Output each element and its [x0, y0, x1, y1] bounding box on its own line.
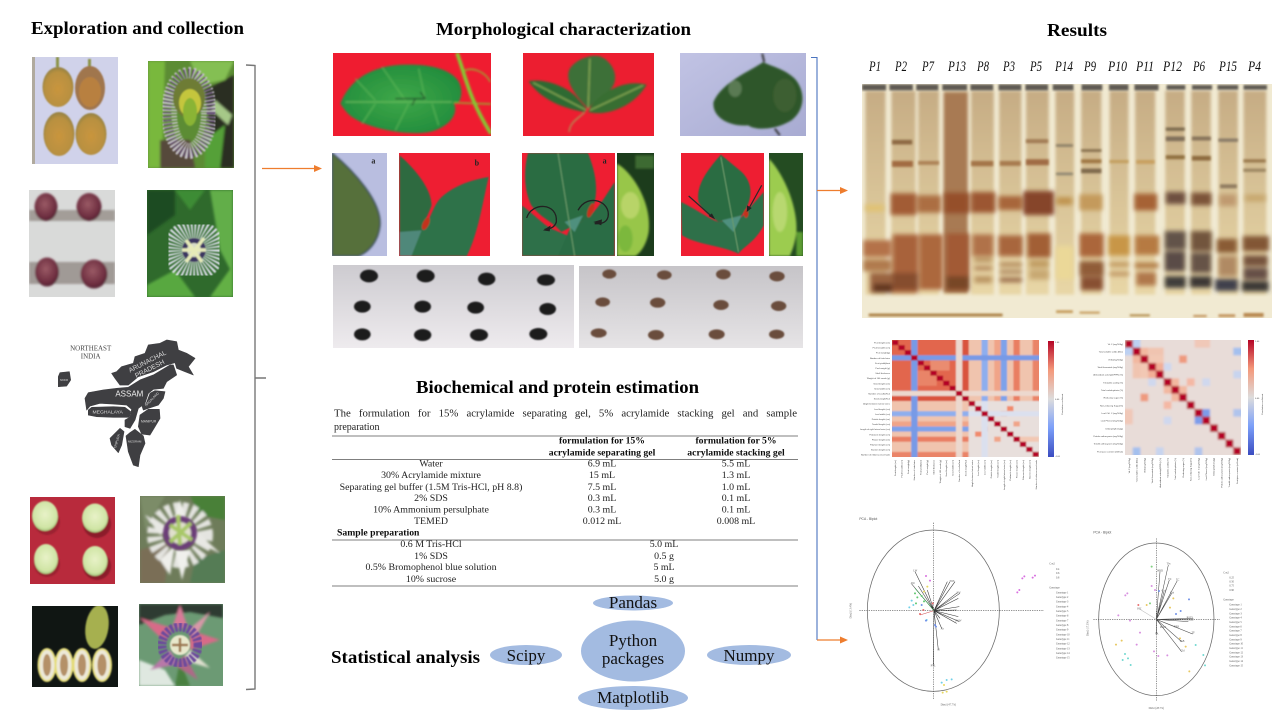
heatmap row labels: Tendril length (cm) [872, 423, 890, 426]
table rows: sample [365, 539, 678, 585]
heatmap column labels: Non-reducing Sugar(%) [1190, 458, 1193, 481]
table rows: sample: 10% sucrose [406, 574, 457, 585]
biplot variable labels: RSTS [1187, 617, 1194, 620]
heatmap row labels: Length of right lateral vein (cm) [860, 428, 890, 431]
heatmap column labels: Seed length (cm) [945, 460, 948, 477]
biplot legend: Genotype 6 [1229, 625, 1242, 628]
photo: blue-white passion flower [147, 190, 233, 297]
chart: biochemical correlation heatmap [1093, 332, 1264, 488]
heatmap row labels: Titratable acidity (%) [1103, 381, 1123, 384]
heatmap colour bar: 0.00 [1255, 398, 1260, 400]
map state labels: MANIPUR [141, 420, 157, 424]
biplot variable labels: SW [957, 591, 961, 594]
photo: white passion flower [140, 496, 225, 583]
photo: leaf underside close-up [617, 153, 654, 256]
heatmap matrix [892, 340, 1039, 457]
heatmap column labels: Length of right lateral vein (cm) [1003, 460, 1006, 490]
photo: leaf edge a [332, 153, 387, 256]
heatmap column labels: Leaf Chl. C (mg/100g) [1198, 458, 1200, 480]
heatmap colour bar [1248, 340, 1264, 456]
heatmap colour bar: -1.00 [1055, 456, 1061, 458]
arrow: to gel result [817, 187, 848, 194]
heatmap row labels: Vit C (mg/100g) [1108, 343, 1123, 346]
heatmap row labels [1093, 343, 1123, 453]
photo: leaf with curved arrows a: a [603, 157, 607, 166]
biplot variable labels: TAB [1179, 640, 1185, 643]
heatmap column labels: Petiole anthocyanin (mg/100g) [1220, 458, 1223, 488]
heatmap colour bar [1048, 341, 1064, 458]
biplot variable labels: LW [913, 570, 918, 573]
table header: acrylamide stacking gel [687, 448, 785, 458]
biplot legend: Genotype 10 [1056, 633, 1070, 636]
heatmap row labels: Seed length (cm) [873, 382, 890, 385]
heatmap column labels: Leaf Phenol (mg/100g) [1206, 458, 1208, 480]
biplot legend [1223, 572, 1244, 667]
map state labels [60, 349, 168, 449]
biplot points [1115, 566, 1206, 672]
heatmap column labels: Seed weight/fruit [964, 460, 967, 476]
heatmap row labels: Antioxidant activity(DPPH) (%) [1093, 374, 1123, 377]
table rules [332, 436, 798, 586]
panel: exploration photos and map [29, 57, 234, 687]
map state labels: PRADESH [134, 359, 166, 380]
heading: biochemical and protein estimation: Biochemical and protein estimation [416, 377, 699, 397]
heading: statistical analysis: Statistical analysis [331, 647, 480, 667]
biplot axis labels: Dim1 (47.7%) [941, 704, 956, 707]
biplot legend: Genotype 4 [1229, 617, 1242, 620]
map state labels: NAGALAND [144, 391, 160, 407]
heatmap row labels: Vit A (mg/100g) [1108, 358, 1123, 361]
photo: black seeds [333, 265, 574, 348]
table rows: gel: 6.9 mL [588, 458, 616, 470]
heatmap row labels: Seed weight/fruit [874, 398, 890, 401]
heatmap column labels: Peduncle length (cm) [1009, 460, 1012, 481]
heatmap row labels: Seed width (cm) [874, 387, 890, 390]
lane labels: P6 [1192, 59, 1205, 75]
node: numpy: Numpy [724, 646, 775, 665]
chart: morphological correlation heatmap [860, 335, 1064, 490]
heatmap row labels: Flower length (cm) [872, 438, 890, 441]
lane labels: P10 [1107, 59, 1127, 75]
heatmap column labels: Titratable acidity (%) [1166, 458, 1170, 478]
heatmap row labels: Shell thickness [875, 372, 891, 375]
photo: leaf with curved arrows a [522, 153, 615, 256]
well band [862, 84, 1267, 90]
heatmap column labels: Number of inflorescence/node [1035, 459, 1038, 489]
biplot arrows [1138, 565, 1193, 652]
map title: NORTHEAST [70, 345, 112, 353]
biplot legend: Genotype 11 [1056, 638, 1070, 641]
biplot legend: Genotype 1 [1056, 591, 1069, 594]
gel lanes [865, 91, 1266, 295]
map title: INDIA [81, 352, 101, 360]
table rows: gel: 1.0 mL [722, 482, 750, 493]
biplot axis labels: Dim2 (13.4%) [849, 603, 852, 618]
photo: leaf with straight arrows [681, 153, 764, 256]
lane labels: P5 [1029, 59, 1042, 75]
node: python packages: packages [602, 649, 664, 668]
biplot legend: Genotype 5 [1056, 610, 1069, 613]
table rows: gel: 5.5 mL [722, 458, 750, 470]
photo: heart-shaped leaf on blue-grey [680, 53, 806, 136]
biplot legend: Genotype 2 [1056, 596, 1069, 599]
biplot legend: Genotype 9 [1056, 629, 1069, 632]
table header: formulation for 5% [695, 436, 777, 446]
table rows: gel: 0.1 mL [722, 493, 750, 504]
heatmap column labels: Total soluble solids (Brix) [1136, 458, 1139, 482]
heatmap matrix [1125, 340, 1241, 455]
biplot ellipse and axes [1093, 538, 1220, 702]
table rows: gel: TEMED [414, 516, 448, 527]
map state labels: ARUNACHAL [128, 349, 168, 374]
heatmap column labels: Shell thickness [932, 459, 935, 475]
table rows: gel: 0.008 mL [717, 516, 755, 527]
main bands [863, 191, 1269, 293]
heatmap row labels: Fruit length (cm) [874, 342, 890, 344]
biplot variable labels: AW [911, 582, 915, 585]
heatmap column labels: Number of fruits/vine [913, 459, 916, 480]
chart: PCA biplot morphological [849, 517, 1070, 707]
arrow: to PCA result [817, 636, 848, 644]
heatmap colour bar: 0.00 [1055, 399, 1060, 401]
biplot variable labels: TF [1192, 632, 1195, 635]
biplot legend: Genotype 15 [1229, 664, 1244, 667]
table rows: gel: 7.5 mL [588, 482, 616, 493]
heatmap column labels: Number of Leaflet/fruit [958, 460, 961, 482]
bracket: left [246, 65, 266, 690]
biplot legend: Genotype 11 [1229, 647, 1244, 650]
lane labels: P14 [1054, 59, 1073, 75]
biplot variable labels: TC [1176, 578, 1180, 581]
heatmap column labels: Reducing sugar (%) [1182, 458, 1185, 477]
table rows: gel: 0.012 mL [583, 516, 621, 527]
node: matplotlib [578, 686, 688, 710]
biplot legend: Genotype 7 [1056, 619, 1069, 622]
biplot legend: Genotype 15 [1056, 657, 1070, 660]
heatmap colour bar: Correlation coefficient [1061, 393, 1064, 415]
node: matplotlib: Matplotlib [597, 688, 669, 707]
map states [58, 340, 195, 467]
photo: ovate leaf on red [333, 53, 491, 136]
heatmap column labels: Angle between lateral veins [971, 459, 974, 487]
biplot variable labels: TWL [949, 580, 955, 583]
heatmap column labels: Leaf width (cm) [984, 460, 987, 475]
biplot axis labels: Dim2 (17.3%) [1086, 621, 1089, 636]
heatmap row labels: Total flavonoids (mg/100g) [1097, 366, 1123, 369]
photo: serrated leaf b: b [475, 158, 480, 167]
heatmap row labels: Chlorophyll (mg/g) [1105, 427, 1123, 430]
heatmap row labels: Stamen length (cm) [871, 449, 890, 452]
heatmap column labels: Fruit breadth (cm) [900, 460, 903, 477]
map state labels: MEGHALAYA [93, 409, 123, 415]
bottom front [869, 310, 1264, 317]
biplot legend [1049, 562, 1070, 660]
table rows: gel: 0.3 mL [588, 504, 616, 516]
biplot legend: Genotype 10 [1229, 643, 1244, 646]
table rows: gel: Water [419, 458, 443, 470]
biplot variable labels: Cl [937, 649, 940, 652]
heading: morphological characterization: Morphological characterization [436, 19, 691, 39]
node: scipy [490, 645, 562, 665]
photo: three-lobed leaf on red [523, 53, 654, 136]
photo: pink passion flower [139, 604, 223, 686]
node: scipy: Scipy [507, 646, 546, 665]
biplot legend: Genotype [1223, 599, 1234, 602]
node: numpy [707, 645, 791, 665]
biplot variable labels: PYL [931, 665, 936, 668]
heatmap row labels: Weight of 100 seeds (g) [867, 377, 890, 380]
heatmap column labels: Flower length (cm) [1016, 460, 1019, 478]
lane labels: P7 [921, 59, 935, 75]
biplot variable labels: NRS [1174, 625, 1180, 628]
heatmap column labels [1128, 458, 1239, 488]
heatmap row labels: Number of inflorescence/node [861, 454, 891, 457]
table rows: sample: 5.0 mL [650, 539, 678, 550]
table rows: sample: 5 mL [653, 562, 675, 573]
diagram: python packages [490, 593, 791, 710]
map state labels: TRIPURA [113, 433, 121, 449]
biplot legend: 0.4 [1056, 568, 1060, 571]
biplot variable labels [1137, 562, 1195, 652]
biplot legend: 0.6 [1056, 572, 1060, 575]
biplot legend: Genotype 3 [1056, 601, 1069, 604]
biplot variable labels: Ctrl [1162, 590, 1166, 593]
map: northeast India [58, 340, 195, 467]
table caption: preparation [334, 422, 380, 433]
heatmap row labels [860, 342, 891, 457]
heatmap row labels: Leaf Phenol (mg/100g) [1101, 421, 1123, 423]
lane labels: P8 [976, 59, 989, 75]
heatmap column labels: Peel weight (g) [926, 460, 929, 475]
table rows: sample: 5.0 g [654, 574, 674, 585]
table rows: gel: 15 mL [589, 470, 615, 481]
heatmap column labels: Filament length (cm) [1022, 460, 1025, 480]
faint upper bands [892, 127, 1266, 188]
photo: leaf edge a: a [371, 157, 375, 166]
table rows: gel: 10% Ammonium persulphate [373, 504, 489, 516]
lane labels [868, 59, 1261, 75]
biplot variable labels: Phnol [1160, 626, 1166, 629]
biplot variable labels [911, 570, 962, 668]
table: acrylamide gel formulation [332, 408, 798, 586]
heading: exploration and collection: Exploration and collection [31, 18, 244, 38]
biplot legend: Genotype [1049, 586, 1060, 589]
heatmap row labels: Peduncle length (cm) [869, 433, 890, 436]
table rows: sample: 0.5 g [654, 551, 674, 562]
heatmap row labels: Filament length (cm) [870, 444, 890, 446]
photo: cut fruits [32, 606, 118, 687]
heatmap row labels: Fruit yield/plant [875, 362, 890, 365]
biplot legend: Genotype 12 [1229, 651, 1244, 654]
biplot legend: Genotype 7 [1229, 630, 1242, 633]
heatmap row labels: Angle between lateral veins [863, 403, 891, 406]
biplot legend: Genotype 3 [1229, 612, 1242, 615]
table rows: gel: 0.3 mL [588, 493, 616, 504]
table rows: sample: 0.5% Bromophenol blue solution [365, 562, 497, 573]
biplot legend: Genotype 8 [1056, 624, 1069, 627]
heatmap colour bar: 1.00 [1055, 342, 1060, 344]
lane labels: P1 [868, 59, 881, 75]
photo: brown seeds [579, 266, 803, 348]
biplot ellipse and axes [859, 523, 1044, 700]
heatmap colour bar: Correlation coefficient [1261, 393, 1264, 415]
biplot legend: Genotype 5 [1229, 621, 1242, 624]
lane labels: P15 [1218, 59, 1237, 75]
table rows: gel: 0.1 mL [722, 504, 750, 516]
biplot variable labels: SWW [955, 620, 962, 623]
photo: serrated leaf b [399, 153, 490, 256]
map state labels: ASSAM [115, 390, 143, 399]
heatmap row labels: Total carbohydrate (%) [1101, 389, 1123, 392]
table rows: gel: Separating gel buffer (1.5M Tris-HCl, pH 8.8) [340, 482, 522, 493]
lane labels: P2 [894, 59, 907, 75]
lane labels: P12 [1162, 59, 1182, 75]
heatmap column labels: Total carbohydrate (%) [1174, 458, 1177, 480]
map state labels: MIZORAM [128, 440, 142, 444]
biplot legend: Genotype 4 [1056, 605, 1069, 608]
heatmap column labels: Petiole length (cm) [990, 460, 993, 478]
bracket: right [811, 58, 817, 640]
biplot variable labels: FJC [1137, 607, 1142, 610]
photo: green leaf close-up [769, 153, 803, 256]
photo: pale green fruits [30, 497, 115, 584]
heatmap column labels: Total flavonoids (mg/100g) [1151, 458, 1154, 484]
biplot title: PCA - Biplot [859, 517, 877, 521]
biplot legend: Genotype 14 [1056, 652, 1070, 655]
table rows: sample: 1% SDS [414, 551, 448, 562]
heatmap row labels: Petiole length (cm) [872, 418, 890, 421]
heatmap row labels: Total soluble solids (Brix) [1099, 351, 1123, 354]
biplot axis labels [1086, 621, 1164, 710]
table caption: The formulation for 15% acrylamide separating gel, 5% acrylamide stacking gel and sample [334, 408, 798, 420]
heatmap row labels: Fruit breadth (cm) [873, 347, 890, 350]
biplot legend: 0.50 [1229, 581, 1235, 584]
heatmap column labels: Stamen length (cm) [1028, 460, 1031, 479]
biplot variable labels: Tbc [1167, 562, 1172, 565]
heatmap column labels: Fruit juice content (ml/fruit) [1236, 458, 1239, 484]
table header [549, 436, 785, 458]
biplot legend: Genotype 14 [1229, 660, 1244, 663]
table rows: gel: 30% Acrylamide mixture [381, 470, 482, 481]
biplot variable labels: Chl [1181, 649, 1185, 652]
heatmap column labels [894, 459, 1038, 490]
table rows: gel: 2% SDS [414, 493, 448, 504]
heatmap column labels: Chlorophyll (mg/g) [1213, 458, 1216, 476]
heatmap column labels: Vit A (mg/100g) [1143, 458, 1146, 473]
heatmap row labels: Tendril anthocyanin (mg/100g) [1094, 443, 1123, 446]
heatmap row labels: Fruit juice content (ml/fruit) [1097, 450, 1123, 453]
lane labels: P3 [1002, 59, 1015, 75]
table rows: sample: 0.6 M Tris-HCl [400, 539, 462, 550]
biplot legend: Genotype 9 [1229, 638, 1242, 641]
biplot legend: 0.90 [1229, 589, 1235, 592]
heatmap row labels: Leaf width (cm) [875, 413, 890, 416]
heatmap row labels: Leaf length (cm) [874, 408, 890, 411]
map state labels: SIKKIM [60, 380, 68, 382]
heatmap column labels: Tendril length (cm) [996, 460, 999, 478]
table header: formulation for 15% [559, 436, 645, 446]
node: pandas: Pandas [609, 593, 657, 612]
lane labels: P13 [947, 59, 966, 75]
biplot legend: Genotype 8 [1229, 634, 1242, 637]
map title [70, 345, 112, 360]
heatmap row labels: Reducing sugar (%) [1104, 397, 1123, 400]
biplot variable labels: Lab [1170, 591, 1175, 594]
table header: acrylamide separating gel [549, 448, 656, 458]
heatmap column labels: Tendril anthocyanin (mg/100g) [1228, 458, 1231, 487]
table rows: gel: 1.3 mL [722, 470, 750, 481]
photo: fringed passion flower [148, 61, 234, 168]
table section heading: Sample preparation [337, 528, 420, 538]
biplot legend: Genotype 13 [1229, 656, 1244, 659]
biplot legend: Genotype 1 [1229, 604, 1242, 607]
arrow: to morphological characterization [262, 165, 322, 172]
biplot variable labels: HRD [1157, 570, 1163, 573]
biplot axis labels [849, 603, 956, 707]
heatmap column labels: Fruit length (cm) [894, 460, 897, 476]
heatmap column labels: Leaf length (cm) [977, 460, 980, 476]
photo: yellow-orange fruits [32, 57, 118, 164]
heading: results: Results [1047, 20, 1107, 40]
heatmap row labels: Number of fruits/vine [870, 357, 891, 360]
node: python packages [581, 620, 685, 682]
node: python packages: Python [609, 631, 658, 650]
heatmap column labels: Antioxidant activity(DPPH) (%) [1159, 458, 1162, 488]
heatmap colour bar: 1.00 [1255, 341, 1260, 343]
biplot variable labels: VA [1155, 632, 1159, 635]
heatmap row labels: Peel weight (g) [875, 367, 890, 370]
biplot legend: 0.75 [1229, 585, 1235, 588]
biplot points [908, 575, 1036, 694]
biplot axis labels: Dim1 (28.7%) [1149, 707, 1164, 710]
lane labels: P9 [1083, 59, 1096, 75]
biplot title: PCA - Biplot [1093, 530, 1111, 534]
heatmap column labels: Fruit weight(g) [907, 460, 910, 474]
table rows: gel [340, 458, 755, 527]
heatmap column labels: Seed width (cm) [952, 460, 955, 476]
photo: purple fruits [29, 190, 115, 297]
heatmap row labels: Fruit weight(g) [876, 352, 890, 355]
heatmap row labels: Petiole anthocyanin (mg/100g) [1093, 435, 1123, 438]
biplot legend: Cos2 [1049, 562, 1055, 565]
biplot arrows [912, 572, 960, 665]
node: pandas [593, 593, 673, 612]
heatmap column labels: Weight of 100 seeds (g) [939, 460, 942, 483]
biplot legend: 0.25 [1229, 577, 1235, 580]
lane labels: P11 [1135, 59, 1154, 75]
heatmap column labels: Vit C (mg/100g) [1128, 458, 1131, 473]
biplot variable labels: Ab [941, 627, 945, 630]
heatmap row labels: Non-reducing Sugar(%) [1100, 404, 1123, 407]
biplot legend: Genotype 12 [1056, 643, 1070, 646]
biplot legend: Genotype 2 [1229, 608, 1242, 611]
chart: PCA biplot biochemical [1086, 530, 1244, 710]
biplot legend: Genotype 13 [1056, 647, 1070, 650]
panel: leaf photos [332, 53, 806, 348]
heatmap column labels: Fruit yield/plant [920, 460, 923, 475]
biplot legend: Cos2 [1223, 572, 1229, 575]
biplot legend: 0.8 [1056, 577, 1060, 580]
heatmap colour bar: -1.00 [1255, 454, 1261, 456]
chart: protein gel [862, 84, 1272, 318]
table caption [334, 408, 798, 433]
heatmap row labels: Leaf Chl. C (mg/100g) [1101, 413, 1123, 415]
biplot variable labels: VC [1168, 578, 1172, 581]
lane labels: P4 [1247, 59, 1261, 75]
biplot legend: Genotype 6 [1056, 615, 1069, 618]
heatmap row labels: Number of Leaflet/fruit [868, 392, 890, 396]
